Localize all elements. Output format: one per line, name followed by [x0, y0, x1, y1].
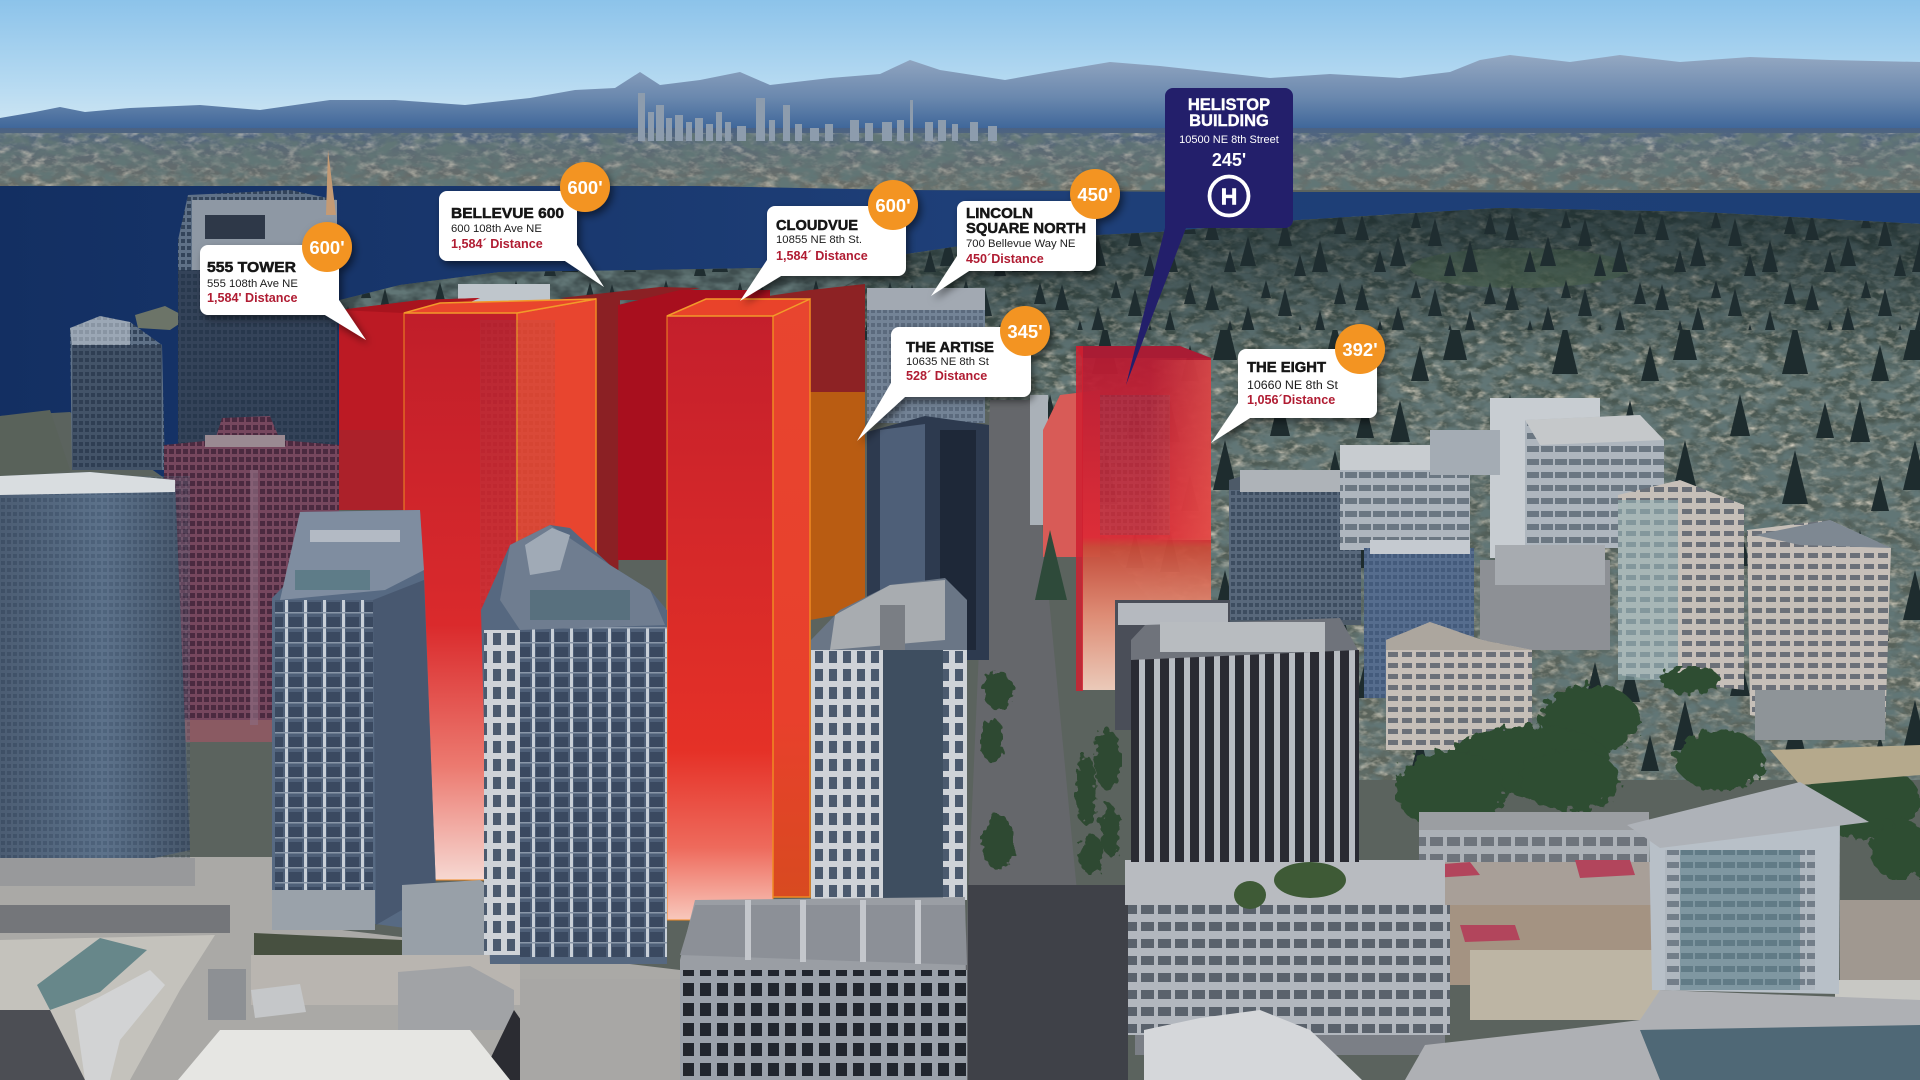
bottom right building — [1405, 990, 1920, 1080]
envelope: dark back right — [768, 284, 865, 620]
tree on street — [1035, 530, 1067, 600]
callout: Lincoln Square North: 450' — [1077, 184, 1113, 205]
helistop second title line: BUILDING — [1189, 112, 1269, 130]
plaza and lower-left ground — [0, 857, 680, 1080]
building: Artise — [867, 416, 989, 660]
envelope: 555 front column — [404, 299, 596, 880]
building: Lincoln Square — [867, 288, 985, 423]
callout: The Artise: 10635 NE 8th St — [906, 356, 990, 368]
bottom centre building — [680, 897, 967, 1080]
callout: Cloudvue: CLOUDVUE — [776, 218, 858, 234]
callout: Bellevue 600: BELLEVUE 600 — [451, 206, 564, 222]
tower A podium — [402, 880, 510, 955]
tower B — [481, 525, 667, 964]
round glass tower — [0, 472, 195, 886]
callout: Cloudvue: 10855 NE 8th St. — [776, 234, 862, 246]
callout: 555 Tower — [200, 222, 366, 340]
callout: Lincoln Square North: 700 Bellevue Way NE — [966, 238, 1076, 250]
tower C — [811, 578, 967, 900]
callout: The Eight — [1211, 324, 1385, 443]
callout: Cloudvue: 600' — [875, 195, 911, 216]
callout: The Artise: 345' — [1007, 321, 1043, 342]
tall striped office tower — [1131, 618, 1359, 862]
foreground towers — [272, 510, 1359, 1080]
callout: The Artise: 528´ Distance — [906, 369, 987, 383]
road and buildings behind street — [960, 395, 1095, 1080]
building: tall tower behind 555 tower — [178, 150, 338, 500]
left wing behind striped tower — [1115, 600, 1230, 730]
callout: The Artise: THE ARTISE — [906, 340, 994, 356]
callout: Lincoln Square North: 450´Distance — [966, 252, 1044, 266]
icon: helipad H: H — [1221, 184, 1237, 210]
tower A — [272, 510, 436, 930]
callout: Cloudvue — [740, 180, 918, 301]
callout: 555 Tower: 600' — [309, 237, 345, 258]
callout: Bellevue 600: 1,584´ Distance — [451, 237, 543, 251]
callout: 555 Tower: 555 TOWER — [207, 260, 297, 276]
bottom white building — [1144, 1010, 1362, 1080]
callout: Helistop Building — [1126, 88, 1293, 385]
envelope: Cloudvue front column — [667, 299, 810, 920]
callout: The Eight: THE EIGHT — [1247, 360, 1326, 376]
callout: Bellevue 600 — [439, 162, 610, 287]
bottom-left transit structure — [0, 938, 165, 1080]
helistop title: HELISTOP — [1188, 96, 1270, 114]
street intersection shadow — [968, 885, 1128, 1080]
low-rise block — [1419, 812, 1920, 1020]
lower office block — [1125, 860, 1450, 1055]
callout: The Artise — [857, 306, 1050, 441]
callout: Cloudvue: 1,584´ Distance — [776, 249, 868, 263]
street trees — [980, 670, 1122, 875]
callout: Lincoln Square North: SQUARE NORTH — [966, 221, 1086, 237]
right side mid-rise buildings — [1229, 398, 1891, 750]
envelope: Helistop target block — [1076, 346, 1211, 691]
callout: Bellevue 600: 600' — [567, 177, 603, 198]
red building envelopes — [339, 284, 1211, 920]
helistop height: 245' — [1212, 150, 1246, 170]
callout: The Eight: 1,056´Distance — [1247, 393, 1335, 407]
envelope: back left 555 tower — [339, 298, 480, 510]
helistop address: 10500 NE 8th Street — [1179, 134, 1279, 146]
callout: 555 Tower: 1,584' Distance — [207, 291, 298, 305]
angled corner tower — [1627, 782, 1869, 994]
callout: The Eight: 10660 NE 8th St — [1247, 378, 1338, 392]
callout: Lincoln Square North — [931, 169, 1120, 296]
trees cluster — [1395, 666, 1920, 880]
callout: The Eight: 392' — [1342, 339, 1378, 360]
building: maroon tower — [164, 416, 339, 742]
icon: helipad H — [1210, 176, 1248, 216]
envelope: Bellevue 600 maroon — [560, 287, 700, 640]
building: small tower left — [70, 316, 165, 470]
callout: 555 Tower: 555 108th Ave NE — [207, 278, 298, 290]
pink tower behind helistop block — [1043, 390, 1100, 557]
callout: Bellevue 600: 600 108th Ave NE — [451, 223, 542, 235]
callout: Lincoln Square North: LINCOLN — [966, 206, 1033, 222]
envelope: Bellevue 600 dark red — [618, 290, 770, 560]
